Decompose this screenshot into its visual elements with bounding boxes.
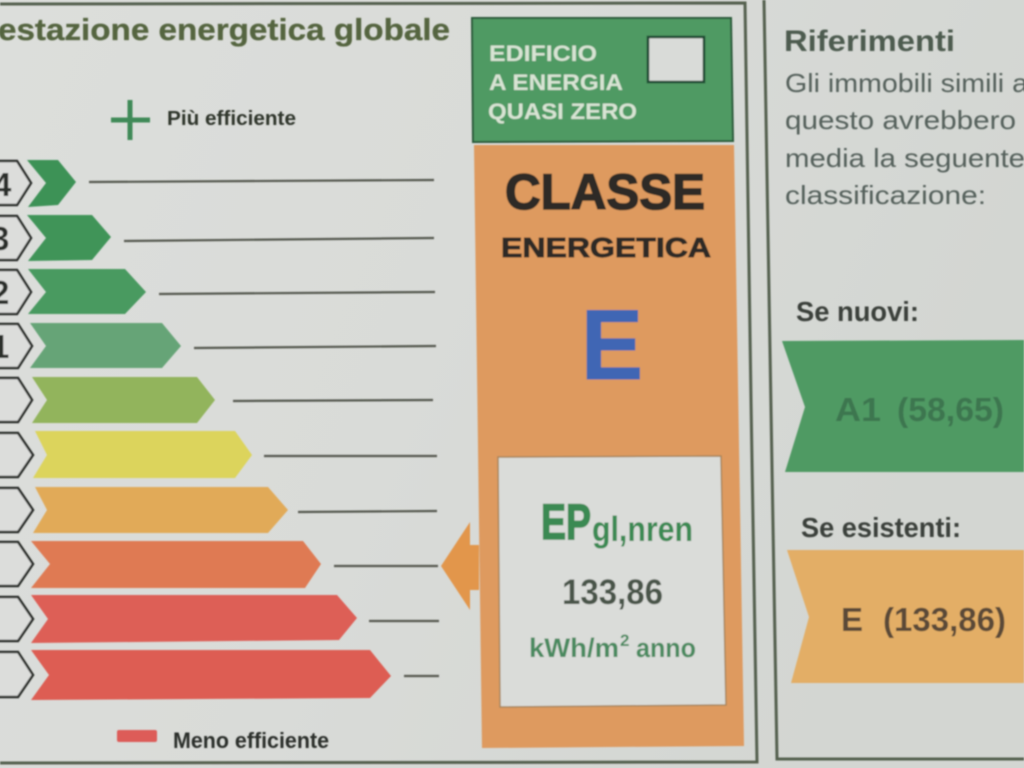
arrow row 1 (0, 160, 434, 207)
unit: anno (636, 633, 696, 663)
panel: riferimenti (764, 0, 1024, 759)
arrow row 2 (0, 215, 434, 261)
arrow row 3 (0, 269, 435, 314)
arrow row 5 (0, 377, 433, 423)
label: meno efficiente: Meno efficiente (173, 728, 329, 753)
panel: prestazione energetica globale (0, 3, 757, 763)
icon: plus, more efficient (111, 100, 150, 140)
arrow: pointer to scale (441, 522, 479, 610)
label: più efficiente: Più efficiente (167, 108, 296, 130)
ribbon: new building class: (58,65) (897, 391, 1004, 428)
description: questo avrebbero (785, 105, 1016, 135)
heading: Riferimenti (784, 25, 955, 58)
badge: edificio a energia quasi zero: QUASI ZERO (488, 99, 637, 124)
label: EP gl,nren: EP (541, 494, 591, 550)
badge: edificio a energia quasi zero: A ENERGIA (489, 70, 623, 95)
scale: energy class arrows (0, 160, 439, 700)
heading: energetica: ENERGETICA (501, 232, 711, 263)
panel: classe energetica (441, 145, 744, 748)
arrow row 10 (0, 650, 439, 700)
heading: classe: CLASSE (505, 164, 705, 220)
label: se nuovi: Se nuovi: (796, 296, 919, 327)
value box (498, 456, 726, 707)
ribbon: existing building class: E (841, 601, 863, 638)
ribbon: existing building class: (133,86) (883, 601, 1006, 638)
value: 133,86 (562, 573, 663, 612)
ribbon: existing building class (787, 550, 1024, 683)
checkbox (648, 37, 704, 82)
arrow row 6 (0, 431, 437, 478)
description (785, 68, 1024, 210)
class letter: E (581, 289, 643, 400)
icon: minus, less efficient (117, 730, 157, 742)
unit (529, 631, 696, 663)
label: se esistenti: Se esistenti: (801, 512, 961, 543)
arrow row 8 (0, 541, 438, 588)
badge: edificio a energia quasi zero (472, 18, 733, 142)
arrow row 4 (0, 323, 436, 368)
unit: kWh/m (529, 633, 619, 663)
badge: edificio a energia quasi zero: EDIFICIO (489, 41, 597, 66)
title: estazione energetica globale (0, 12, 450, 47)
ribbon: new building class (782, 340, 1024, 472)
value box: gl,nren (592, 510, 693, 549)
description: media la seguente (785, 143, 1024, 173)
unit: 2 (620, 631, 629, 650)
arrow row 9 (0, 595, 439, 643)
ribbon: new building class: A1 (835, 391, 881, 428)
description: Gli immobili simili a (785, 68, 1024, 98)
description: classificazione: (785, 180, 986, 210)
arrow row 7 (0, 487, 437, 533)
